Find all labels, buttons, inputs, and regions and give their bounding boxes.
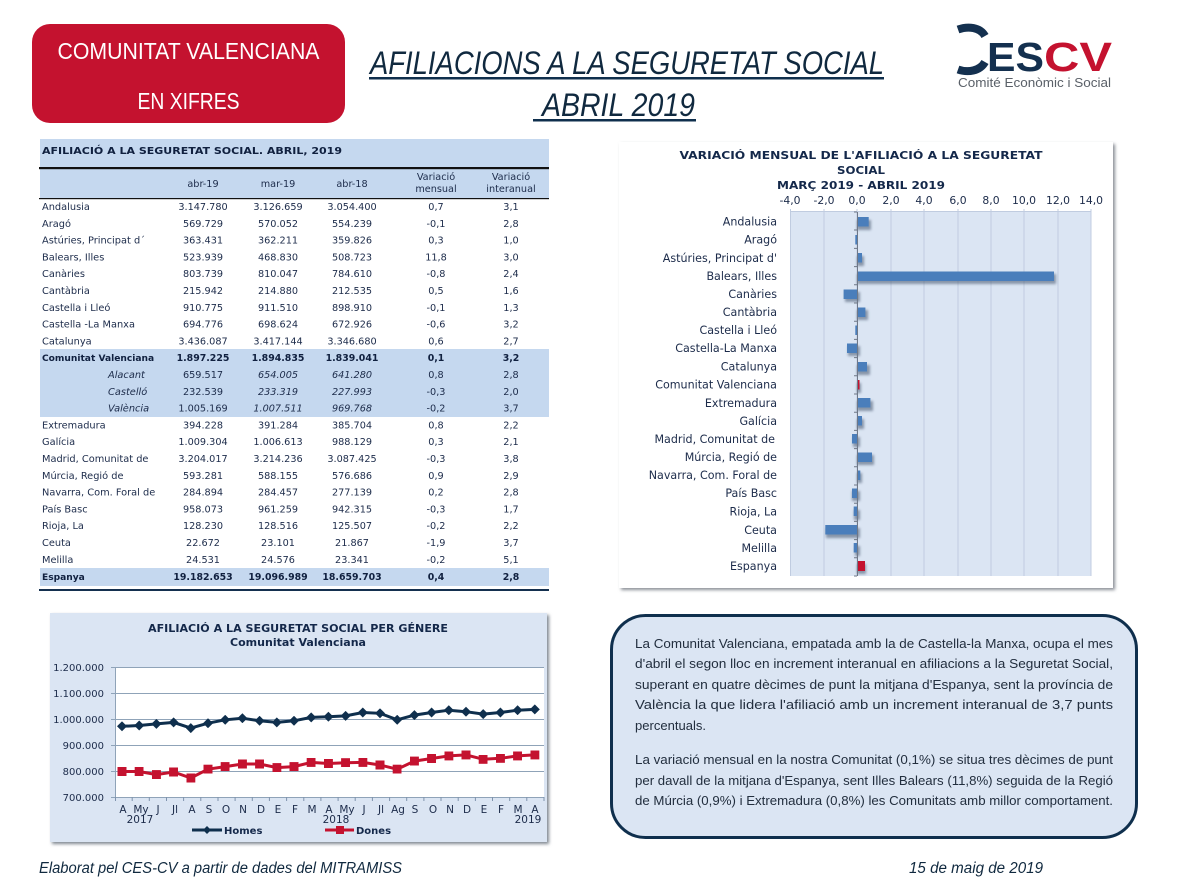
top axis labels: -2,0 — [813, 194, 835, 207]
callout: summary text: La variació mensual en la nostra Comunitat (0,1%) se situa tres dècimes de punt — [635, 752, 1113, 767]
table rows: 784.610 — [332, 269, 372, 280]
table rows: 0,1 — [428, 353, 444, 364]
table rows: -0,3 — [427, 504, 445, 515]
table rows: Cantàbria — [42, 285, 90, 297]
line chart heading: Comunitat Valenciana — [230, 637, 366, 649]
table rows: 23.341 — [335, 555, 369, 566]
table rows: 3.214.236 — [253, 454, 303, 465]
x axis labels: M — [513, 804, 523, 816]
table rows: 569.729 — [183, 219, 223, 230]
x axis labels: F — [498, 804, 504, 816]
callout: summary text: La Comunitat Valenciana, empatada amb la de Castella-la Manxa, ocupa el mes — [635, 636, 1114, 651]
category labels: Andalusia — [723, 216, 777, 228]
table rows: 394.228 — [183, 420, 223, 431]
series: Dones — [122, 755, 535, 778]
y axis labels: 800.000 — [63, 767, 104, 778]
x axis labels: F — [292, 804, 298, 816]
table rows: -0,1 — [427, 303, 445, 314]
table: afiliació a la Seguretat Social — [39, 139, 549, 591]
table rows: 3.204.017 — [178, 454, 228, 465]
table rows: Melilla — [42, 555, 73, 566]
table heading: AFILIACIÓ A LA SEGURETAT SOCIAL. ABRIL, 2019 — [42, 145, 342, 157]
top axis labels: 8,0 — [982, 194, 1000, 207]
category labels: Melilla — [741, 542, 777, 555]
x axis labels: 2019 — [515, 814, 541, 826]
table rows: -0,8 — [427, 269, 445, 280]
table rows: 0,6 — [428, 336, 444, 347]
table rows: País Basc — [42, 503, 88, 515]
table rows: 5,1 — [503, 555, 519, 566]
bar chart heading: MARÇ 2019 - ABRIL 2019 — [777, 180, 945, 192]
plot area with gridlines — [790, 209, 1091, 576]
top axis labels: 6,0 — [949, 194, 967, 207]
table rows: 1.894.835 — [252, 353, 304, 364]
plot area — [111, 667, 544, 801]
table rows: 898.910 — [332, 303, 372, 314]
table rows: 911.510 — [258, 303, 298, 314]
table rows: Navarra, Com. Foral de — [42, 488, 155, 499]
x axis labels: Jl — [171, 804, 178, 816]
table rows: 554.239 — [332, 219, 372, 230]
table rows: 3.147.780 — [178, 202, 228, 213]
table rows: 2,8 — [503, 370, 519, 381]
top axis labels: 12,0 — [1046, 194, 1070, 207]
table rows: 21.867 — [335, 538, 369, 549]
table rows: 0,4 — [428, 572, 445, 583]
callout: summary text: València la que lidera l'afiliació amb un increment interanual de 3,7 punts — [635, 697, 1114, 712]
table rows: 391.284 — [258, 420, 298, 431]
table rows: 277.139 — [332, 488, 372, 499]
table rows: 2,4 — [503, 269, 519, 280]
callout: summary text: d'abril el segon lloc en increment interanual en afiliacions a la Seguretat Social, — [635, 656, 1113, 671]
table rows: 284.894 — [183, 488, 223, 499]
badge: Comunitat Valenciana en xifres — [32, 24, 345, 123]
bars: regions — [825, 217, 1054, 552]
table rows: 570.052 — [258, 219, 298, 230]
top axis labels: 0,0 — [848, 194, 866, 207]
table rows: 1.005.169 — [178, 404, 228, 415]
table rows: Andalusia — [42, 202, 90, 213]
table rows: 227.993 — [332, 387, 372, 398]
table rows: 1,6 — [503, 286, 519, 297]
table rows: 3,2 — [503, 353, 519, 364]
table rows: 0,8 — [428, 370, 444, 381]
column headers: Variació — [492, 171, 530, 183]
table rows: 23.101 — [261, 538, 295, 549]
table rows: 3.417.144 — [253, 336, 303, 347]
category labels: Galícia — [739, 415, 777, 428]
x axis labels: My — [339, 804, 355, 816]
table rows: 3,8 — [503, 454, 519, 465]
category labels: Navarra, Com. Foral de — [649, 469, 777, 482]
column headers — [187, 171, 536, 195]
table rows: 0,5 — [428, 286, 444, 297]
top axis labels: 4,0 — [915, 194, 933, 207]
column headers: Variació — [417, 171, 455, 183]
series: Homes — [122, 709, 535, 728]
x axis labels: O — [222, 804, 230, 816]
table rows: 508.723 — [332, 252, 372, 263]
category labels: Extremadura — [705, 397, 777, 410]
category labels: Catalunya — [721, 360, 777, 374]
table rows: Rioja, La — [42, 521, 84, 532]
y axis labels: 700.000 — [63, 793, 104, 804]
x axis labels: A — [325, 804, 333, 816]
table rows: 672.926 — [332, 320, 372, 331]
table rows: Canàries — [42, 268, 85, 280]
table rows: València — [108, 403, 149, 415]
table rows: 19.182.653 — [173, 572, 233, 583]
legend: Dones — [356, 826, 391, 837]
table rows: Castella i Lleó — [42, 302, 110, 314]
table rows: 3,7 — [503, 404, 519, 415]
x axis labels: N — [239, 804, 247, 816]
category labels: Astúries, Principat d' — [663, 252, 777, 265]
table rows: 2,8 — [503, 488, 519, 499]
logo: CES CV: CV — [1044, 34, 1113, 80]
category labels: Canàries — [728, 288, 777, 301]
table rows: 1.009.304 — [178, 437, 228, 448]
x axis labels: J — [361, 804, 366, 816]
table rows: 24.576 — [261, 555, 295, 566]
table rows: 385.704 — [332, 420, 372, 431]
callout: summary text: superant en quatre dècimes de punt la mitjana d'Espanya, sent la província de — [635, 677, 1113, 692]
table rows: 0,9 — [428, 471, 444, 482]
table rows: 3.054.400 — [327, 202, 377, 213]
category labels: Balears, Illes — [706, 270, 777, 283]
table rows: 18.659.703 — [322, 572, 382, 583]
table rows: 2,7 — [503, 336, 519, 347]
x axis labels: My — [133, 804, 149, 816]
top axis labels: -4,0 — [779, 194, 801, 207]
table rows: 641.280 — [332, 370, 372, 381]
badge: Comunitat Valenciana en xifres: EN XIFRES — [138, 88, 240, 114]
table rows: 233.319 — [258, 387, 298, 398]
vertical axis — [854, 212, 858, 576]
table rows: 19.096.989 — [248, 572, 308, 583]
table rows: 961.259 — [258, 504, 298, 515]
x axis labels: J — [155, 804, 160, 816]
x axis labels: D — [257, 804, 265, 816]
table rows: 942.315 — [332, 504, 372, 515]
table rows: Múrcia, Regió de — [42, 470, 124, 482]
table rows: 1,7 — [503, 504, 519, 515]
table rows: 359.826 — [332, 236, 372, 247]
category labels: Madrid, Comunitat de — [654, 433, 775, 446]
table rows: 214.880 — [258, 286, 298, 297]
table rows: 0,2 — [428, 488, 444, 499]
table rows: Ceuta — [42, 538, 71, 549]
title: ABRIL 2019 — [540, 87, 695, 123]
title: AFILIACIONS A LA SEGURETAT SOCIAL — [368, 45, 884, 81]
x axis labels: 2017 — [127, 814, 153, 826]
table rows: 523.939 — [183, 252, 223, 263]
line chart heading — [148, 622, 448, 649]
table rows: -0,2 — [427, 404, 445, 415]
table rows: 654.005 — [258, 370, 298, 381]
table rows: Aragó — [42, 218, 71, 230]
x axis labels: E — [275, 804, 281, 816]
table rows: 698.624 — [258, 320, 298, 331]
table rows: -0,2 — [427, 521, 445, 532]
y axis labels: 1.000.000 — [53, 715, 104, 726]
table rows: 468.830 — [258, 252, 298, 263]
x axis labels — [119, 804, 541, 826]
table rows: 215.942 — [183, 286, 223, 297]
badge: Comunitat Valenciana en xifres: COMUNITAT VALENCIANA — [58, 38, 320, 64]
bar chart heading — [680, 149, 1043, 192]
x axis labels: 2018 — [323, 814, 349, 826]
category labels: Comunitat Valenciana — [655, 378, 777, 392]
column headers: mensual — [415, 184, 457, 195]
table rows: 958.073 — [183, 504, 223, 515]
category labels: Castella i Lleó — [700, 324, 777, 337]
table rows: 1,3 — [503, 303, 519, 314]
table rows: Castella -La Manxa — [42, 320, 135, 331]
table rows: 2,0 — [503, 387, 519, 398]
category labels: Rioja, La — [730, 506, 777, 518]
legend — [192, 826, 391, 837]
table rows: 2,2 — [503, 521, 519, 532]
y axis labels: 1.100.000 — [53, 689, 104, 700]
table rows: 232.539 — [183, 387, 223, 398]
table rows: 910.775 — [183, 303, 223, 314]
table rows: 2,2 — [503, 420, 519, 431]
table rows: 593.281 — [183, 471, 223, 482]
table rows — [42, 202, 519, 583]
table rows: 3,0 — [503, 252, 519, 263]
footer: date: 15 de maig de 2019 — [909, 860, 1043, 877]
x axis labels: N — [446, 804, 454, 816]
logo: CES CV — [958, 28, 1113, 90]
x axis labels: O — [429, 804, 437, 816]
table rows: 3.087.425 — [327, 454, 377, 465]
table rows: Espanya — [42, 573, 85, 583]
table rows: 0,8 — [428, 420, 444, 431]
x axis labels: S — [412, 804, 419, 816]
category labels: Castella-La Manxa — [675, 342, 777, 355]
table rows: 969.768 — [332, 404, 372, 415]
table rows: 1,0 — [503, 236, 519, 247]
table rows: 284.457 — [258, 488, 298, 499]
table rows: 128.230 — [183, 521, 223, 532]
table rows: 2,9 — [503, 471, 519, 482]
top axis labels: 14,0 — [1079, 194, 1103, 207]
table rows: 803.739 — [183, 269, 223, 280]
table rows: 2,8 — [503, 572, 519, 583]
x axis labels: S — [206, 804, 213, 816]
x axis labels: Jl — [377, 804, 384, 816]
table rows: -0,3 — [427, 387, 445, 398]
table rows: -1,9 — [427, 538, 445, 549]
category labels: Ceuta — [744, 524, 777, 537]
category labels — [649, 216, 777, 573]
table rows: 11,8 — [425, 252, 447, 263]
top axis labels: 2,0 — [882, 194, 900, 207]
y axis labels: 900.000 — [63, 741, 104, 752]
table rows: Extremadura — [42, 420, 106, 431]
table rows: 3.436.087 — [178, 336, 228, 347]
y axis labels — [53, 663, 104, 804]
column headers: abr-19 — [187, 179, 219, 190]
table rows: Alacant — [107, 370, 146, 381]
table rows: -0,2 — [427, 555, 445, 566]
table rows: 24.531 — [186, 555, 220, 566]
table rows: 576.686 — [332, 471, 372, 482]
top axis labels: 10,0 — [1012, 194, 1036, 207]
category labels: País Basc — [725, 487, 777, 500]
bar chart heading: SOCIAL — [837, 165, 885, 177]
table rows: 2,1 — [503, 437, 519, 448]
category labels: Cantàbria — [723, 306, 777, 319]
table rows: -0,6 — [427, 320, 445, 331]
x axis labels: A — [188, 804, 196, 816]
category labels: Espanya — [730, 560, 777, 573]
table rows: 22.672 — [186, 538, 220, 549]
table rows: -0,3 — [427, 454, 445, 465]
table rows: Balears, Illes — [42, 252, 104, 263]
table rows: 3,2 — [503, 320, 519, 331]
column headers: interanual — [486, 184, 536, 195]
table rows: 1.839.041 — [326, 353, 378, 364]
table rows: 0,3 — [428, 437, 444, 448]
table rows: 3,1 — [503, 202, 519, 213]
table rows: 810.047 — [258, 269, 298, 280]
column headers: mar-19 — [261, 179, 295, 190]
table rows: 2,8 — [503, 219, 519, 230]
x axis labels: Ag — [391, 804, 405, 816]
logo: CES CV: Comité Econòmic i Social — [958, 75, 1111, 90]
legend: Homes — [224, 826, 262, 837]
table rows: 362.211 — [258, 236, 298, 247]
table rows: 0,3 — [428, 236, 444, 247]
table rows: 212.535 — [332, 286, 372, 297]
table rows: Astúries, Principat d´ — [42, 235, 145, 247]
table rows: 588.155 — [258, 471, 298, 482]
x axis labels: D — [463, 804, 471, 816]
table rows: 988.129 — [332, 437, 372, 448]
table rows: 3,7 — [503, 538, 519, 549]
title — [368, 45, 884, 123]
x axis labels: A — [531, 804, 539, 816]
callout: summary text: per davall de la mitjana d'Espanya, sent Illes Balears (11,8%) seguida de la Regió — [635, 773, 1113, 788]
panel: bar chart monthly variation — [619, 142, 1115, 590]
table rows: Castelló — [108, 386, 147, 398]
category labels: Múrcia, Regió de — [685, 451, 777, 464]
table rows: Catalunya — [42, 336, 92, 347]
x axis labels: A — [119, 804, 127, 816]
table rows: 1.006.613 — [253, 437, 303, 448]
bars shadow — [826, 220, 1056, 574]
table rows: 694.776 — [183, 320, 223, 331]
table rows: Madrid, Comunitat de — [42, 454, 148, 465]
callout: summary text — [612, 616, 1136, 838]
callout: summary text: de Múrcia (0,9%) i Extremadura (0,8%) les Comunitats amb millor comportament. — [635, 793, 1113, 808]
table rows: 3.126.659 — [253, 202, 303, 213]
table rows: -0,1 — [427, 219, 445, 230]
table rows: 128.516 — [258, 521, 298, 532]
table rows: 363.431 — [183, 236, 223, 247]
table rows: 0,7 — [428, 202, 444, 213]
bar chart heading: VARIACIÓ MENSUAL DE L'AFILIACIÓ A LA SEGURETAT — [680, 149, 1043, 162]
table rows: 125.507 — [332, 521, 372, 532]
logo: CES CV: ES — [987, 34, 1044, 80]
table rows: 659.517 — [183, 370, 223, 381]
table rows: 1.897.225 — [177, 353, 229, 364]
x axis labels: E — [481, 804, 487, 816]
table rows: Galícia — [42, 436, 75, 448]
footer: source: Elaborat pel CES-CV a partir de dades del MITRAMISS — [39, 860, 403, 877]
table rows: Comunitat Valenciana — [42, 354, 154, 364]
table rows: 1.007.511 — [253, 404, 303, 415]
top axis labels — [779, 194, 1103, 207]
bars: highlighted Comunitat Valenciana and Espanya — [857, 380, 865, 571]
line chart heading: AFILIACIÓ A LA SEGURETAT SOCIAL PER GÉNERE — [148, 622, 448, 635]
category labels: Aragó — [744, 234, 777, 246]
column headers: abr-18 — [336, 179, 368, 190]
panel: line chart by gender — [50, 613, 549, 844]
table rows: 3.346.680 — [327, 336, 377, 347]
y axis labels: 1.200.000 — [53, 663, 104, 674]
x axis labels: M — [307, 804, 317, 816]
callout: summary text: percentuals. — [635, 718, 706, 733]
